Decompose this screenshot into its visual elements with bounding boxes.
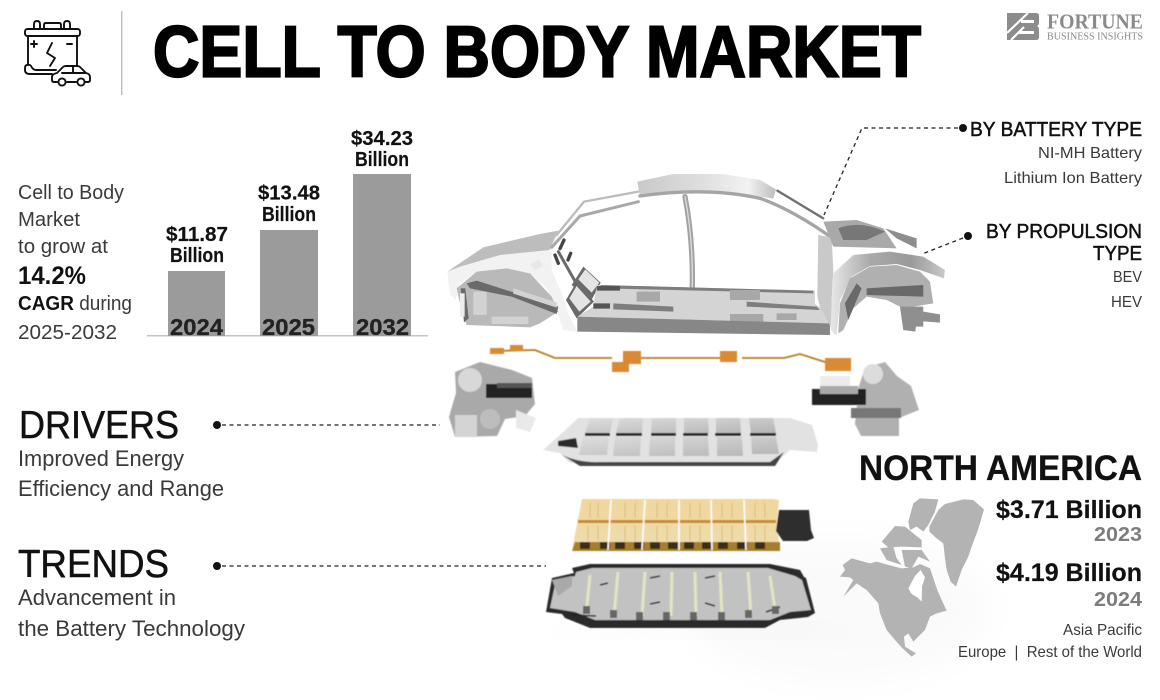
logo: Fortune Business Insights: BUSINESS INSIGHTS — [1047, 32, 1143, 42]
callout: by battery type: NI-MH Battery — [1038, 145, 1142, 162]
logo text: FORTUNE — [1047, 10, 1143, 34]
title: CELL TO BODY MARKET — [153, 12, 921, 92]
bar 2032: $34.23 — [351, 128, 413, 150]
bar 2024: $11.87 — [166, 224, 228, 246]
leader line — [824, 124, 967, 215]
bar 2024: 2024 — [170, 314, 223, 340]
drivers block — [18, 404, 224, 501]
text: CAGR callout: Market — [18, 209, 80, 231]
text: CAGR callout: to grow at — [18, 236, 108, 258]
icon: battery with car — [25, 21, 90, 86]
connector: trends — [213, 562, 546, 570]
callout: by propulsion type: BY PROPULSION — [986, 221, 1142, 243]
divider — [121, 11, 122, 95]
bar 2024: Billion — [170, 245, 224, 267]
regional stats — [859, 449, 1143, 661]
callout: by propulsion type — [922, 221, 1142, 311]
bar 2025 — [258, 182, 320, 340]
front fender — [817, 220, 945, 335]
trends block: TRENDS — [18, 543, 169, 586]
regional stats: Europe | Rest of the World — [958, 644, 1142, 661]
regional stats: $3.71 Billion — [996, 496, 1142, 524]
trends block: Advancement in — [18, 585, 176, 610]
bar 2025: Billion — [262, 204, 316, 226]
Hudson Bay — [908, 570, 925, 602]
trends block — [18, 543, 246, 641]
text: CAGR callout: 14.2% — [18, 262, 86, 290]
bar 2032: Billion — [355, 149, 409, 171]
seat panels — [566, 267, 601, 318]
callout: by propulsion type: HEV — [1111, 294, 1142, 311]
upper battery cover plate — [543, 418, 818, 466]
logo: Fortune Business Insights — [1007, 10, 1143, 42]
callout: by battery type — [824, 119, 1142, 215]
callout: by battery type: Lithium Ion Battery — [1004, 170, 1142, 187]
text: CAGR callout: CAGR during — [18, 293, 132, 315]
regional stats: 2024 — [1094, 589, 1143, 611]
bar 2025: 2025 — [262, 314, 315, 340]
car body frame — [447, 174, 945, 335]
drivers block: Efficiency and Range — [18, 476, 224, 501]
roof — [637, 174, 776, 199]
drivers block: Improved Energy — [18, 446, 185, 471]
text: CAGR callout: 2025-2032 — [18, 322, 117, 344]
regional stats: 2023 — [1094, 524, 1142, 546]
floor — [577, 285, 830, 335]
connector: drivers — [213, 421, 440, 429]
bar 2025: $13.48 — [258, 182, 320, 204]
text: CAGR callout — [18, 182, 132, 344]
text: CAGR callout: Cell to Body — [18, 182, 124, 204]
wiring harness — [490, 345, 851, 372]
regional stats: $4.19 Billion — [996, 559, 1142, 587]
bar chart — [147, 128, 428, 340]
regional stats: NORTH AMERICA — [859, 449, 1142, 488]
background shading — [690, 540, 990, 680]
leader line — [922, 232, 972, 254]
electric drive unit left — [449, 362, 536, 437]
Canadian Arctic islands — [880, 498, 938, 568]
map: North America — [840, 498, 984, 657]
roof rails and pillars — [552, 191, 835, 320]
electric drive unit right — [812, 362, 919, 436]
lower battery tray — [545, 564, 855, 636]
callout: by battery type: BY BATTERY TYPE — [970, 119, 1142, 141]
rear quarter — [447, 231, 577, 332]
drivers block: DRIVERS — [19, 404, 179, 447]
bar 2032 — [351, 128, 413, 340]
bar 2024 — [166, 224, 228, 340]
logo mark — [1007, 13, 1039, 40]
gold battery modules — [572, 499, 814, 551]
callout: by propulsion type: TYPE — [1093, 243, 1142, 265]
trends block: the Battery Technology — [18, 616, 246, 641]
bar 2032: 2032 — [356, 314, 409, 340]
mainland — [840, 558, 947, 657]
regional stats: Asia Pacific — [1063, 622, 1142, 639]
callout: by propulsion type: BEV — [1113, 269, 1142, 286]
battery plate cells — [579, 418, 779, 456]
Greenland — [929, 499, 984, 587]
battery controller — [776, 510, 814, 541]
